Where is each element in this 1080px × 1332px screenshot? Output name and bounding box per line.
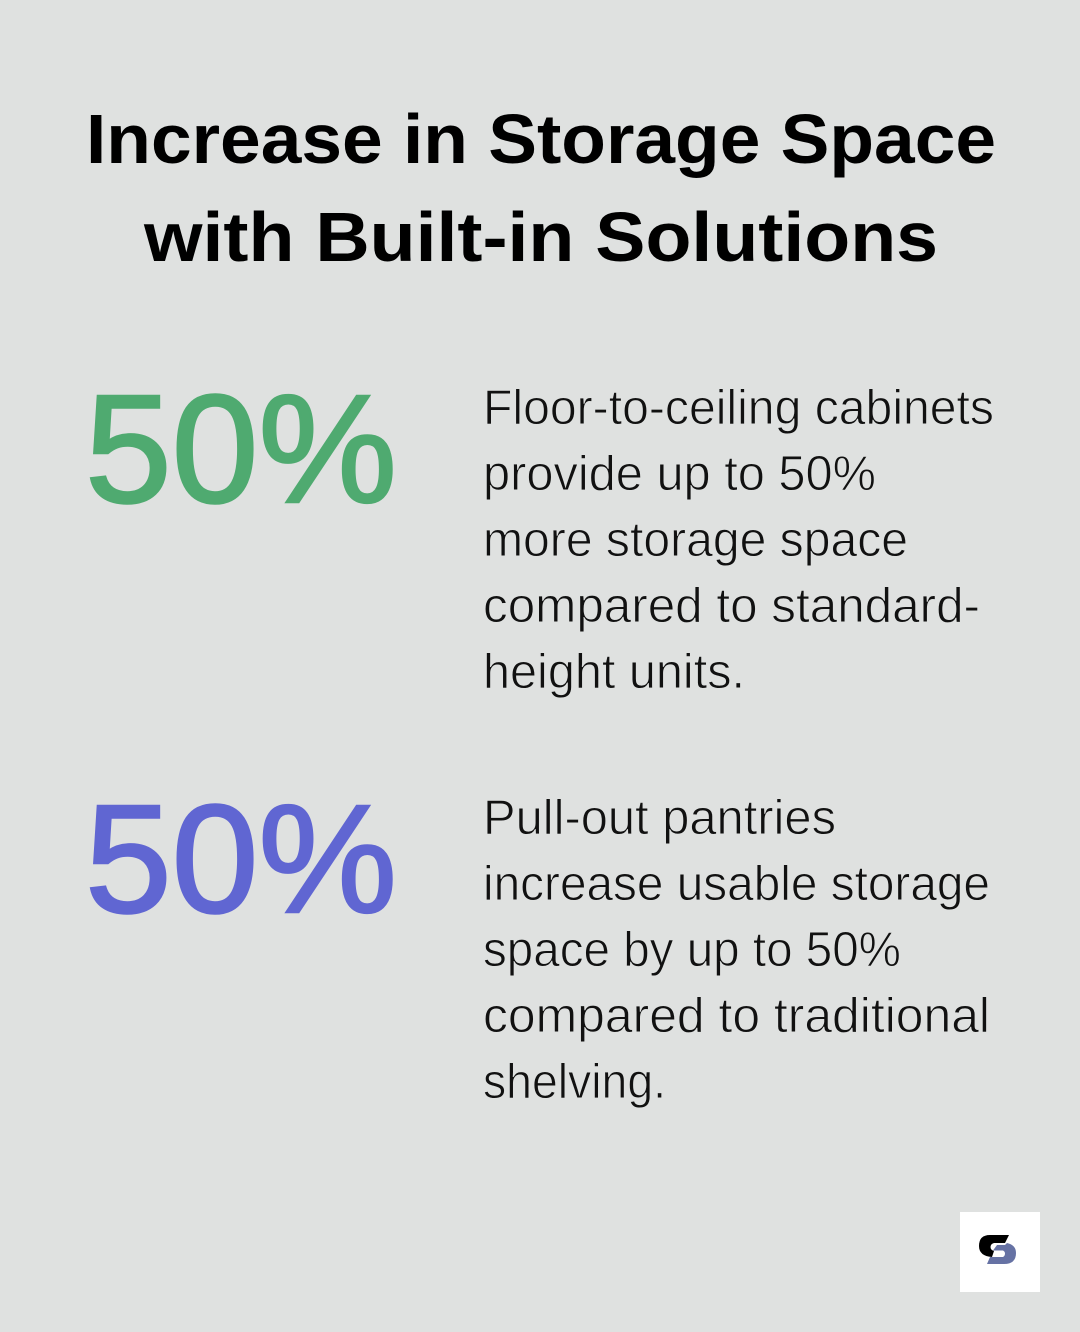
text block: pull-out pantries: shelving. [483, 1055, 666, 1109]
title: with Built-in Solutions [143, 198, 938, 276]
icon: logo mark [979, 1235, 1016, 1264]
stat: green 50%: 50% [85, 363, 397, 535]
text block: floor-to-ceiling cabinets: provide up to 50% [483, 447, 876, 501]
text block: pull-out pantries: space by up to 50% [483, 923, 901, 977]
text block: pull-out pantries: compared to traditional [483, 989, 990, 1043]
text block: floor-to-ceiling cabinets [483, 381, 994, 699]
text block: floor-to-ceiling cabinets: more storage space [483, 513, 908, 567]
text block: floor-to-ceiling cabinets: height units. [483, 645, 745, 699]
title: Increase in Storage Space [86, 100, 996, 178]
text block: pull-out pantries: increase usable storage [483, 857, 990, 911]
text block: pull-out pantries: Pull-out pantries [483, 791, 836, 845]
text block: floor-to-ceiling cabinets: compared to standard- [483, 579, 980, 633]
text block: floor-to-ceiling cabinets: Floor-to-ceiling cabinets [483, 381, 994, 435]
title [86, 100, 996, 276]
stat: blue 50%: 50% [85, 773, 397, 945]
logo badge [960, 1212, 1040, 1292]
text block: pull-out pantries [483, 791, 990, 1109]
